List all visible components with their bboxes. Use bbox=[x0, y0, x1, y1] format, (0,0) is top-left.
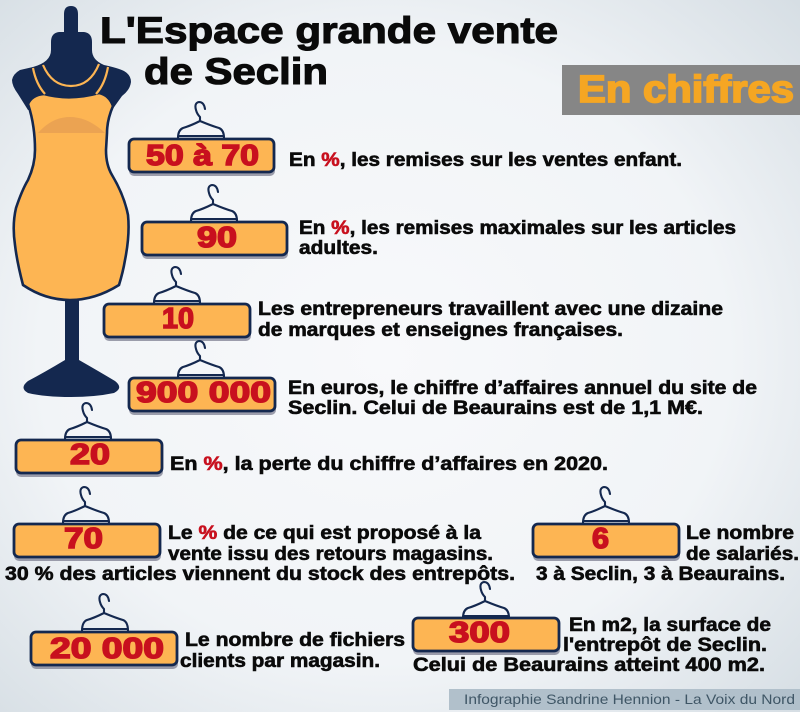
dress body bbox=[14, 93, 129, 300]
credit: Infographie Sandrine Hennion - La Voix du Nord bbox=[464, 691, 795, 707]
text: salariés bbox=[536, 523, 799, 585]
stat: 20 bbox=[16, 403, 163, 477]
text: salariés: de salariés. bbox=[686, 544, 799, 565]
stat: 6 bbox=[533, 487, 680, 561]
title bbox=[100, 10, 558, 92]
icon: dress mannequin bbox=[12, 6, 131, 397]
hanger bbox=[154, 267, 200, 303]
hanger bbox=[191, 185, 237, 221]
text: salariés: 3 à Seclin, 3 à Beaurains. bbox=[536, 564, 785, 585]
stat: 6: 6 bbox=[592, 523, 609, 555]
text: fichiers clients: Le nombre de fichiers bbox=[185, 630, 405, 651]
text: surface entrepôt: l'entrepôt de Seclin. bbox=[563, 635, 767, 656]
stat: 10 bbox=[104, 267, 251, 341]
stat: 20 000: 20 000 bbox=[50, 633, 164, 665]
bust shading bbox=[38, 117, 105, 133]
hanger bbox=[82, 594, 128, 631]
stat: 20 000 bbox=[31, 594, 178, 669]
text: chiffre d'affaires: Seclin. Celui de Beaurains est de 1,1 M€. bbox=[288, 398, 703, 419]
stat: 10: 10 bbox=[162, 303, 194, 335]
text: fichiers clients: clients par magasin. bbox=[180, 651, 380, 672]
text: retours magasins bbox=[5, 523, 515, 585]
text: remises adultes: adultes. bbox=[299, 238, 378, 259]
text: remises adultes bbox=[299, 218, 736, 259]
banner: En chiffres bbox=[562, 65, 800, 115]
title: de Seclin bbox=[144, 51, 328, 92]
credit bbox=[449, 689, 800, 710]
hanger bbox=[63, 487, 109, 523]
title: L'Espace grande vente bbox=[100, 10, 558, 51]
text: surface entrepôt bbox=[413, 615, 771, 676]
text: fichiers clients bbox=[180, 630, 405, 672]
text: surface entrepôt: En m2, la surface de bbox=[569, 615, 771, 636]
hanger bbox=[65, 403, 111, 439]
text: retours magasins: 30 % des articles viennent du stock des entrepôts. bbox=[5, 564, 515, 585]
text: remises enfant: En %, les remises sur les ventes enfant. bbox=[289, 150, 682, 171]
text: remises adultes: En %, les remises maximales sur les articles bbox=[299, 218, 736, 239]
stat: 900 000: 900 000 bbox=[136, 377, 271, 409]
stat: 300 bbox=[413, 582, 560, 655]
text: retours magasins: vente issu des retours magasins. bbox=[168, 544, 493, 565]
hanger bbox=[463, 582, 509, 618]
stat: 300: 300 bbox=[449, 617, 510, 649]
text: retours magasins: Le % de ce qui est proposé à la bbox=[168, 523, 481, 544]
text: entrepreneurs: Les entrepreneurs travaillent avec une dizaine bbox=[258, 299, 723, 320]
text: entrepreneurs bbox=[258, 299, 723, 341]
hanger bbox=[583, 487, 629, 523]
stand and base bbox=[24, 296, 119, 397]
hanger bbox=[178, 102, 224, 138]
text: entrepreneurs: de marques et enseignes françaises. bbox=[258, 320, 623, 341]
stat: 70 bbox=[14, 487, 161, 561]
text: salariés: Le nombre bbox=[686, 523, 794, 544]
hanger bbox=[178, 341, 224, 377]
stat: 50 à 70 bbox=[129, 102, 275, 176]
text: surface entrepôt: Celui de Beaurains atteint 400 m2. bbox=[413, 655, 765, 676]
text: chiffre d'affaires: En euros, le chiffre d’affaires annuel du site de bbox=[288, 378, 757, 399]
stat: 20: 20 bbox=[70, 439, 110, 471]
text: perte 2020: En %, la perte du chiffre d’affaires en 2020. bbox=[170, 454, 608, 475]
stat: 90 bbox=[142, 185, 288, 259]
text: chiffre d'affaires bbox=[288, 378, 757, 419]
stat: 900 000 bbox=[129, 341, 276, 415]
banner: En chiffres: En chiffres bbox=[578, 69, 794, 111]
stat: 50 à 70: 50 à 70 bbox=[146, 140, 259, 172]
stat: 90: 90 bbox=[197, 222, 237, 254]
necklace and straps bbox=[33, 64, 108, 94]
stat: 70: 70 bbox=[64, 523, 103, 555]
